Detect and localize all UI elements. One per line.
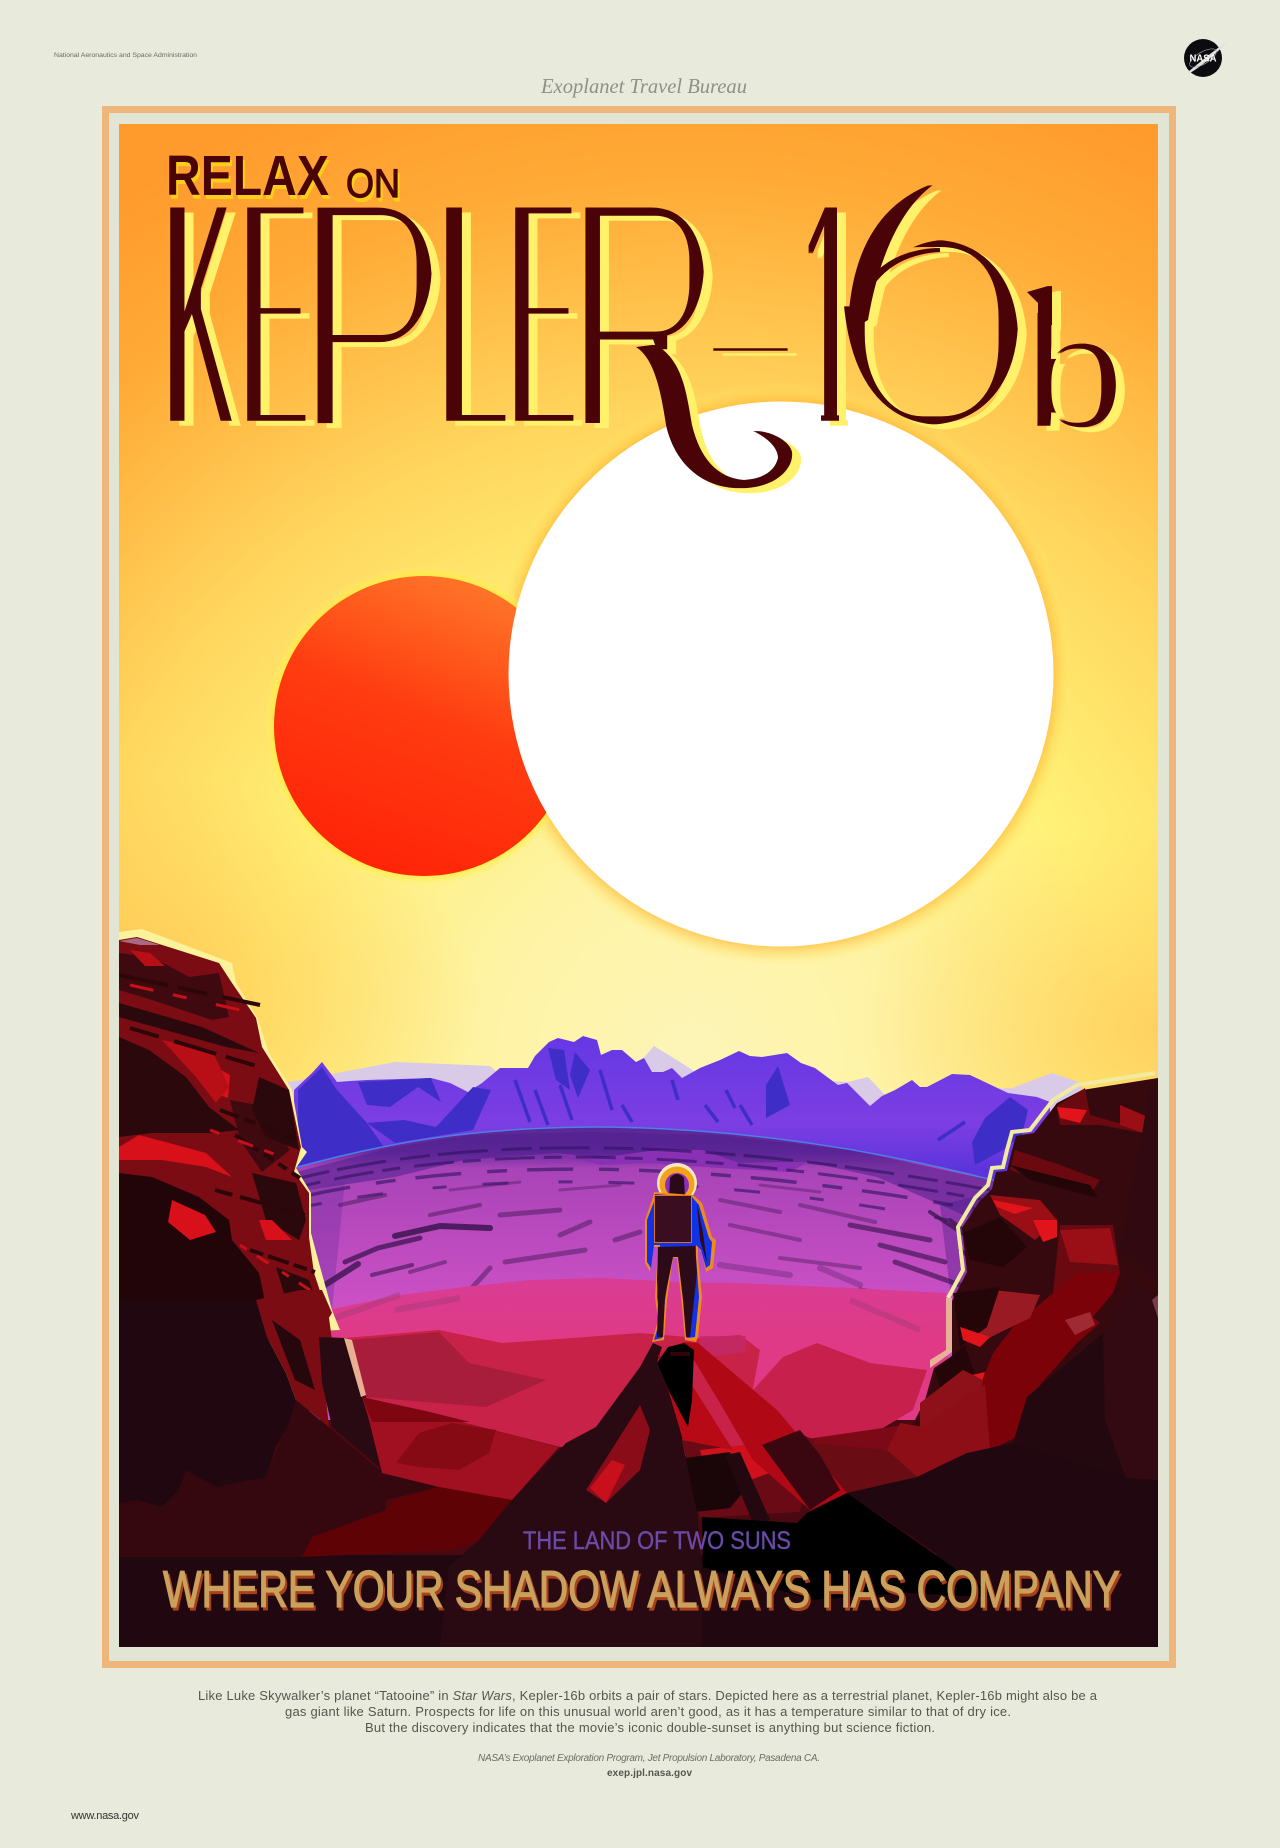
planet surface dome (294, 1127, 1000, 1460)
tagline: the land of two suns: THE LAND OF TWO SUNS (523, 1527, 791, 1555)
panel: poster illustration (119, 124, 1180, 1647)
foreground ground and shadow masses (119, 1290, 1158, 1647)
right cliff (880, 1073, 1180, 1500)
title: KEPLER-16b: E (509, 126, 576, 505)
astronaut figure (645, 1163, 716, 1342)
title: KEPLER-16b: 6 (812, 18, 1046, 534)
faint distant mountains (288, 1046, 1082, 1112)
title: KEPLER-16b: P (296, 120, 447, 532)
caption text (198, 1688, 1098, 1735)
purple mountain range (294, 1036, 1050, 1195)
header: Exoplanet Travel Bureau: Exoplanet Travel Bureau (540, 74, 747, 98)
astronaut shadows (440, 1342, 1000, 1647)
caption text: gas giant like Saturn. Prospects for life on this unusual world aren’t good, as it has a temperature similar to that of dry ice. (285, 1704, 1011, 1719)
heading: on: ON (346, 162, 400, 206)
title: KEPLER-16b: - (702, 134, 798, 514)
title: KEPLER-16b: 1 (801, 126, 857, 505)
sky background (119, 124, 1158, 1400)
title: KEPLER-16b (163, 126, 1125, 514)
footer url: www.nasa.gov (70, 1810, 140, 1822)
header: agency name: National Aeronautics and Space Administration (54, 52, 197, 59)
icon: red sun (270, 572, 550, 884)
title: KEPLER-16b: b (1024, 281, 1125, 465)
left cliff (119, 929, 340, 1340)
icon: NASA logo: NASA (1190, 54, 1216, 64)
title: KEPLER-16b: K (163, 126, 237, 505)
caption text: But the discovery indicates that the movie’s iconic double-sunset is anything but science fiction. (365, 1720, 935, 1735)
website link: exep.jpl.nasa.gov (607, 1768, 692, 1779)
credit line: NASA’s Exoplanet Exploration Program, Jet Propulsion Laboratory, Pasadena CA. (478, 1753, 820, 1764)
poster frame (106, 110, 1172, 1664)
title: KEPLER-16b: R (564, 117, 723, 541)
heading: relax: RELAX (166, 144, 329, 208)
title: KEPLER-16b: E (241, 126, 308, 505)
icon: white sun (508, 402, 1054, 946)
caption text: Like Luke Skywalker’s planet “Tatooine” in Star Wars, Kepler-16b orbits a pair of stars. Depicted here as a terrestrial planet, Kepler-16b might also be a (198, 1688, 1098, 1703)
glow of white sun (489, 382, 1073, 966)
icon: NASA logo (1184, 39, 1228, 77)
title: KEPLER-16b: L (438, 126, 508, 505)
base of lower landscape (119, 1400, 1158, 1647)
